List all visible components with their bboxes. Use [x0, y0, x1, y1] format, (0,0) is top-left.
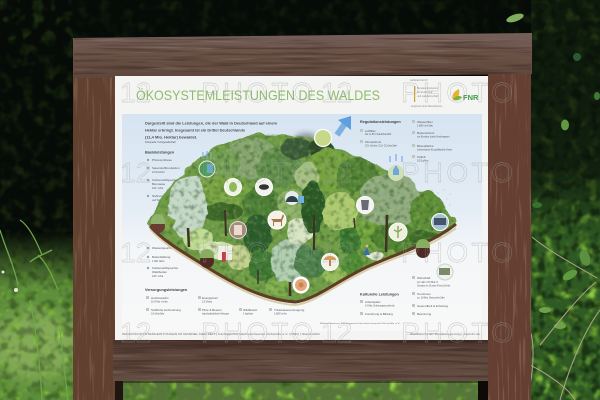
list: Regulationsleistungen: Lebensraum für gefährdete Arten — [417, 148, 453, 152]
icon: saw and hut — [218, 246, 232, 262]
watermark: 12 — [321, 317, 352, 348]
list: Versorgungsleistungen: 10,9 Mio. fm/ha — [151, 300, 168, 304]
footer credit — [122, 322, 481, 336]
list: Regulationsleistungen: Klimaschutz — [365, 140, 382, 144]
icon: people — [432, 214, 448, 230]
smog behind leaf icon — [294, 133, 318, 147]
icon: walker — [363, 244, 370, 255]
right post — [488, 70, 531, 400]
list: Regulationsleistungen: Wasserfilter — [417, 120, 433, 124]
list: Basisleistungen: Basisleistungen — [145, 150, 175, 154]
icon: herb — [389, 223, 407, 241]
grass blades — [0, 220, 68, 400]
list: Versorgungsleistungen: Energieholz — [202, 296, 218, 300]
watermark: 12 — [321, 157, 352, 188]
logo: ministry: für Ernährung — [417, 91, 433, 94]
list: Regulationsleistungen: vor Erosion durch Hochwasser — [417, 136, 450, 138]
list: Regulationsleistungen: Bodenschutz — [417, 131, 435, 135]
intro text — [145, 122, 277, 144]
list: Versorgungsleistungen: Pilze & Beeren — [202, 308, 222, 312]
footer credit: WALDÖKOSYSTEMLEISTUNGEN IM WANDEL DER ZEIT | Fachagentur Nachwachsende Rohstoffe e.V. (FNR) | Stand 2021 — [122, 332, 321, 336]
list: Basisleistungen: und Wasser — [152, 199, 165, 202]
list: Kulturelle Leistungen: pro Jahr 170 Mrd. € — [417, 281, 439, 284]
icon: deer — [268, 211, 286, 229]
list: Versorgungsleistungen: Versorgungsleistungen — [145, 288, 188, 292]
list: Regulationsleistungen: Biotopfläche — [417, 144, 434, 148]
list: Versorgungsleistungen: 1 kg/ha/a — [243, 312, 254, 316]
list: Kulturelle Leistungen: Gesundheit & Erholung — [417, 304, 448, 308]
list: Basisleistungen: 10 t/ha/Jahr — [152, 171, 165, 174]
footer credit: Bildnachweise: Fachagentur Nachwachsende Rohstoffe e.V. — [320, 322, 401, 325]
icon: leaf top — [314, 130, 332, 146]
watermark: PHOTO — [401, 157, 513, 188]
watermark: PHOTO — [201, 317, 313, 348]
list: Basisleistungen: Nährstoffe — [152, 194, 166, 198]
dotted rain — [432, 190, 450, 210]
list: Versorgungsleistungen: 1.800 l/m²/a — [274, 312, 287, 316]
tree trunks — [188, 210, 387, 296]
icon: water droplets — [388, 154, 404, 181]
logo: ministry: Gefördert durch — [410, 79, 428, 82]
list: Kulturelle Leistungen: ca. 18 Mio. Besucher/Jahr — [417, 296, 445, 300]
list: Versorgungsleistungen: 2,5 t/ha/a — [202, 300, 213, 304]
list: Basisleistungen: Sauerstoffproduktion — [152, 166, 180, 170]
list: Versorgungsleistungen: Stoffliche Holznutzung — [151, 308, 181, 312]
icon: mushroom — [322, 254, 338, 270]
watermark: PHOTO — [401, 77, 513, 108]
list: Kulturelle Leistungen: Kulturelle Leistungen — [360, 292, 399, 296]
list: Versorgungsleistungen: Trinkwassererzeugung — [274, 308, 305, 312]
list: Regulationsleistungen: Regulationsleistungen — [360, 120, 401, 124]
list: Regulationsleistungen: bis zu 50 t Staub/ha/Jahr — [365, 133, 392, 136]
list: Basisleistungen: Photosynthese — [152, 158, 172, 162]
canopy base — [148, 134, 456, 304]
watermark: PHOTO — [401, 237, 513, 268]
watermark: 12 — [120, 157, 151, 188]
list: soil services: Bodenbildung — [152, 255, 171, 259]
list: Versorgungsleistungen: Wildfleisch — [243, 308, 258, 312]
list: soil services: Waldboden — [152, 270, 167, 274]
list: soil services: 120 t C/ha — [152, 275, 164, 278]
wooden frame — [73, 33, 532, 400]
tree crowns — [225, 138, 279, 178]
icon: soil left — [151, 214, 165, 233]
list: Regulationsleistungen: Teilluft — [417, 155, 426, 159]
logo: ministry — [410, 79, 443, 108]
branch — [530, 237, 600, 400]
icon: plant — [224, 178, 242, 196]
list: Kulturelle Leistungen — [360, 276, 451, 316]
list: Kulturelle Leistungen: Arbeitsplatz — [365, 300, 381, 304]
list: Regulationsleistungen: 1.800 l/m²/Jahr — [417, 124, 433, 128]
intro text: (11,4 Mio. Hektar) bewaldet. — [145, 134, 197, 140]
list: Basisleistungen — [145, 150, 180, 202]
foliage texture — [145, 125, 460, 305]
list: Regulationsleistungen: 5-15 g/l/ha — [417, 160, 429, 162]
icon: beetle — [256, 178, 272, 196]
list: Kulturelle Leistungen: Tourismus — [417, 292, 431, 296]
forest illustration — [145, 125, 460, 305]
watermark — [120, 77, 513, 348]
left post — [73, 70, 115, 400]
watermark: 12 — [321, 237, 352, 268]
list: Kulturelle Leistungen: Forschung & Bildung — [365, 312, 393, 316]
list: Kulturelle Leistungen: 14 Mio. Erholungssuchende — [365, 304, 395, 308]
list: soil services: Wasserspeicher — [152, 246, 173, 250]
grass under beam — [123, 380, 478, 400]
sign panel — [115, 76, 488, 340]
icon: wood tag — [230, 222, 246, 238]
watermark: PHOTO — [201, 77, 313, 108]
list: Basisleistungen: 100 t C/ha — [152, 187, 164, 190]
title: ÖKOSYSTEMLEISTUNGEN DES WALDES — [136, 88, 380, 103]
list: Versorgungsleistungen — [145, 288, 305, 316]
blue arrow — [337, 116, 351, 135]
watermark: PHOTO — [201, 157, 313, 188]
icon: tree rings — [292, 276, 310, 294]
ground band — [150, 224, 456, 305]
watermark: 12 — [120, 237, 151, 268]
intro text: Dargestellt sind die Leistungen, die der Wald in Deutschland auf einem — [145, 122, 277, 126]
intro text: Hektar erbringt. Insgesamt ist ein Drittel Deutschlands — [145, 128, 245, 132]
list: Versorgungsleistungen: 3,8 t/ha/Jahr — [151, 312, 164, 316]
watermark: 12 — [321, 77, 352, 108]
footer credit: Waldbericht der Bundesregierung | www.fnr.de — [410, 332, 481, 336]
list: Regulationsleistungen — [360, 120, 453, 162]
watermark: PHOTO — [401, 317, 513, 348]
list: soil services: 1.000 Jahre — [152, 260, 165, 263]
watermark: PHOTO — [201, 237, 313, 268]
list: Basisleistungen: Biomasse — [152, 182, 166, 186]
list: soil services: Kohlenstoffspeicher — [152, 266, 178, 270]
list: Versorgungsleistungen: Holzzuwachs — [151, 296, 169, 300]
logo: FNR — [452, 89, 479, 102]
list: Kulturelle Leistungen: Wirtschaft — [417, 276, 431, 280]
round icons — [151, 130, 453, 294]
illustration panel background — [122, 114, 482, 331]
icon: soil right — [416, 239, 430, 258]
icon: soil middle — [200, 249, 214, 268]
icon: cup — [356, 196, 374, 214]
icon: water vapour — [199, 151, 215, 177]
list: Basisleistungen: Kohlenstoffspeicher — [152, 178, 178, 182]
logo: FNR: FNR — [463, 93, 479, 102]
list: Kulturelle Leistungen: Umsatz im Cluster Forst & Holz — [417, 284, 451, 288]
list: Versorgungsleistungen: haushaltsübliche Mengen — [202, 312, 230, 316]
logo: ministry: und Landwirtschaft — [417, 95, 438, 98]
list: Regulationsleistungen: Luftfilter — [365, 129, 376, 133]
list: Kulturelle Leistungen: Besinnung — [417, 312, 432, 316]
icon: forestry truck — [437, 264, 453, 280]
intro text: Fotoquelle: Forstgesellschaft — [145, 141, 176, 144]
watermark: 12 — [120, 77, 151, 108]
list: soil services — [147, 246, 178, 278]
logo: ministry: Bundesministerium — [417, 87, 438, 90]
top beam — [73, 33, 532, 78]
watermark: 12 — [120, 317, 151, 348]
list: Regulationsleistungen: CO₂-Senke: 5,5 t CO₂/ha/Jahr — [365, 144, 397, 148]
icon: cave — [285, 191, 304, 205]
logo: ministry: aufgrund eines Beschlusses — [411, 105, 443, 108]
lower beam — [113, 340, 488, 381]
